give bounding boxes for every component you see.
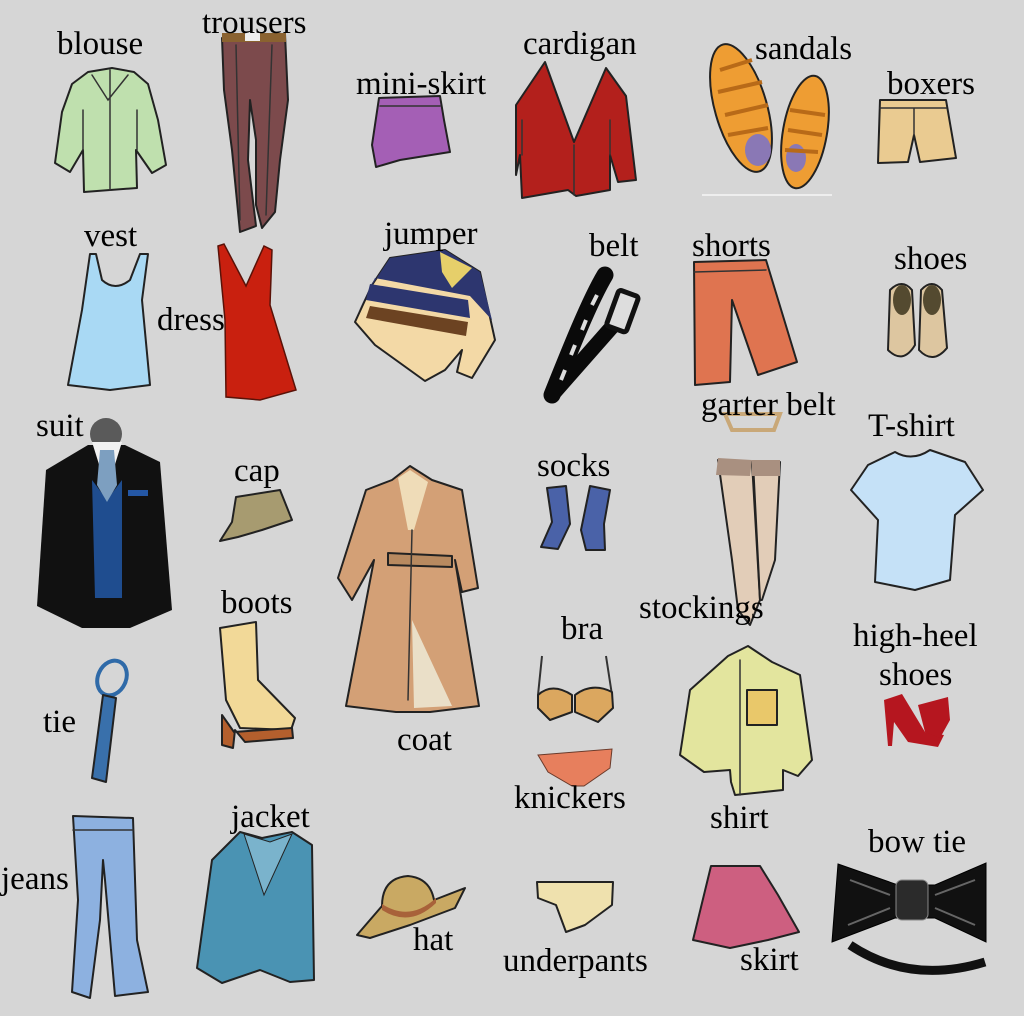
label: bra: bra [561,611,603,647]
label: jumper: jumper [383,216,477,252]
icon: jumper [355,250,495,381]
icon: underpants [537,882,613,932]
icon: boxers [878,100,956,163]
icon: vest [68,254,150,390]
label: stockings: stockings [639,590,764,626]
label: underpants: underpants [503,943,648,979]
icon: high-heel shoes [884,694,950,747]
icon: bow tie [832,863,986,970]
label: dress: dress [157,302,225,338]
label: high-heel shoes second line: shoes [879,657,952,693]
icon: cardigan [516,62,636,198]
label: suit: suit [36,408,84,444]
label: jacket: jacket [230,799,310,835]
icon: knickers [538,749,612,786]
label: cardigan: cardigan [523,26,637,62]
icon: cap [220,490,292,541]
label: cap: cap [234,453,280,489]
label: coat: coat [397,722,452,758]
icon: jacket [197,832,314,983]
icon: shoes [888,284,947,357]
label: tie: tie [43,704,76,740]
label: mini-skirt: mini-skirt [356,66,486,102]
icon: belt [552,275,639,395]
label: socks: socks [537,448,610,484]
label: shoes: shoes [894,241,967,277]
icon: boots [220,622,295,748]
label: skirt: skirt [740,942,799,978]
icon: bra [538,656,613,722]
label: high-heel shoes: high-heel [853,618,978,654]
icon: mini-skirt [372,96,450,167]
icon: sandals [698,37,837,195]
icon: coat [338,466,479,712]
label: blouse: blouse [57,26,143,62]
label: trousers: trousers [202,5,306,41]
icon: shorts [694,260,797,385]
icon: tie [92,656,132,782]
label: boots: boots [221,585,293,621]
icon: socks [541,486,610,550]
icon: T-shirt [851,450,983,590]
label: vest: vest [84,218,137,254]
icon: skirt [693,866,799,948]
icon: shirt [680,646,812,795]
label: T-shirt: T-shirt [868,408,955,444]
label: hat: hat [413,922,453,958]
label: bow tie: bow tie [868,824,966,860]
icon: dress [218,244,296,400]
label: sandals: sandals [755,31,852,67]
label: belt: belt [589,228,638,264]
label: knickers: knickers [514,780,626,816]
label: garter belt: garter belt [701,387,836,423]
label: boxers: boxers [887,66,975,102]
label: shirt: shirt [710,800,769,836]
icon: hat [357,876,465,938]
icon: blouse [55,68,166,192]
label: shorts: shorts [692,228,771,264]
label: jeans: jeans [0,861,69,897]
icon: suit [37,418,172,628]
icon: garter belt and stockings [716,414,780,625]
icon: jeans [72,816,148,998]
icon: trousers [222,31,288,232]
